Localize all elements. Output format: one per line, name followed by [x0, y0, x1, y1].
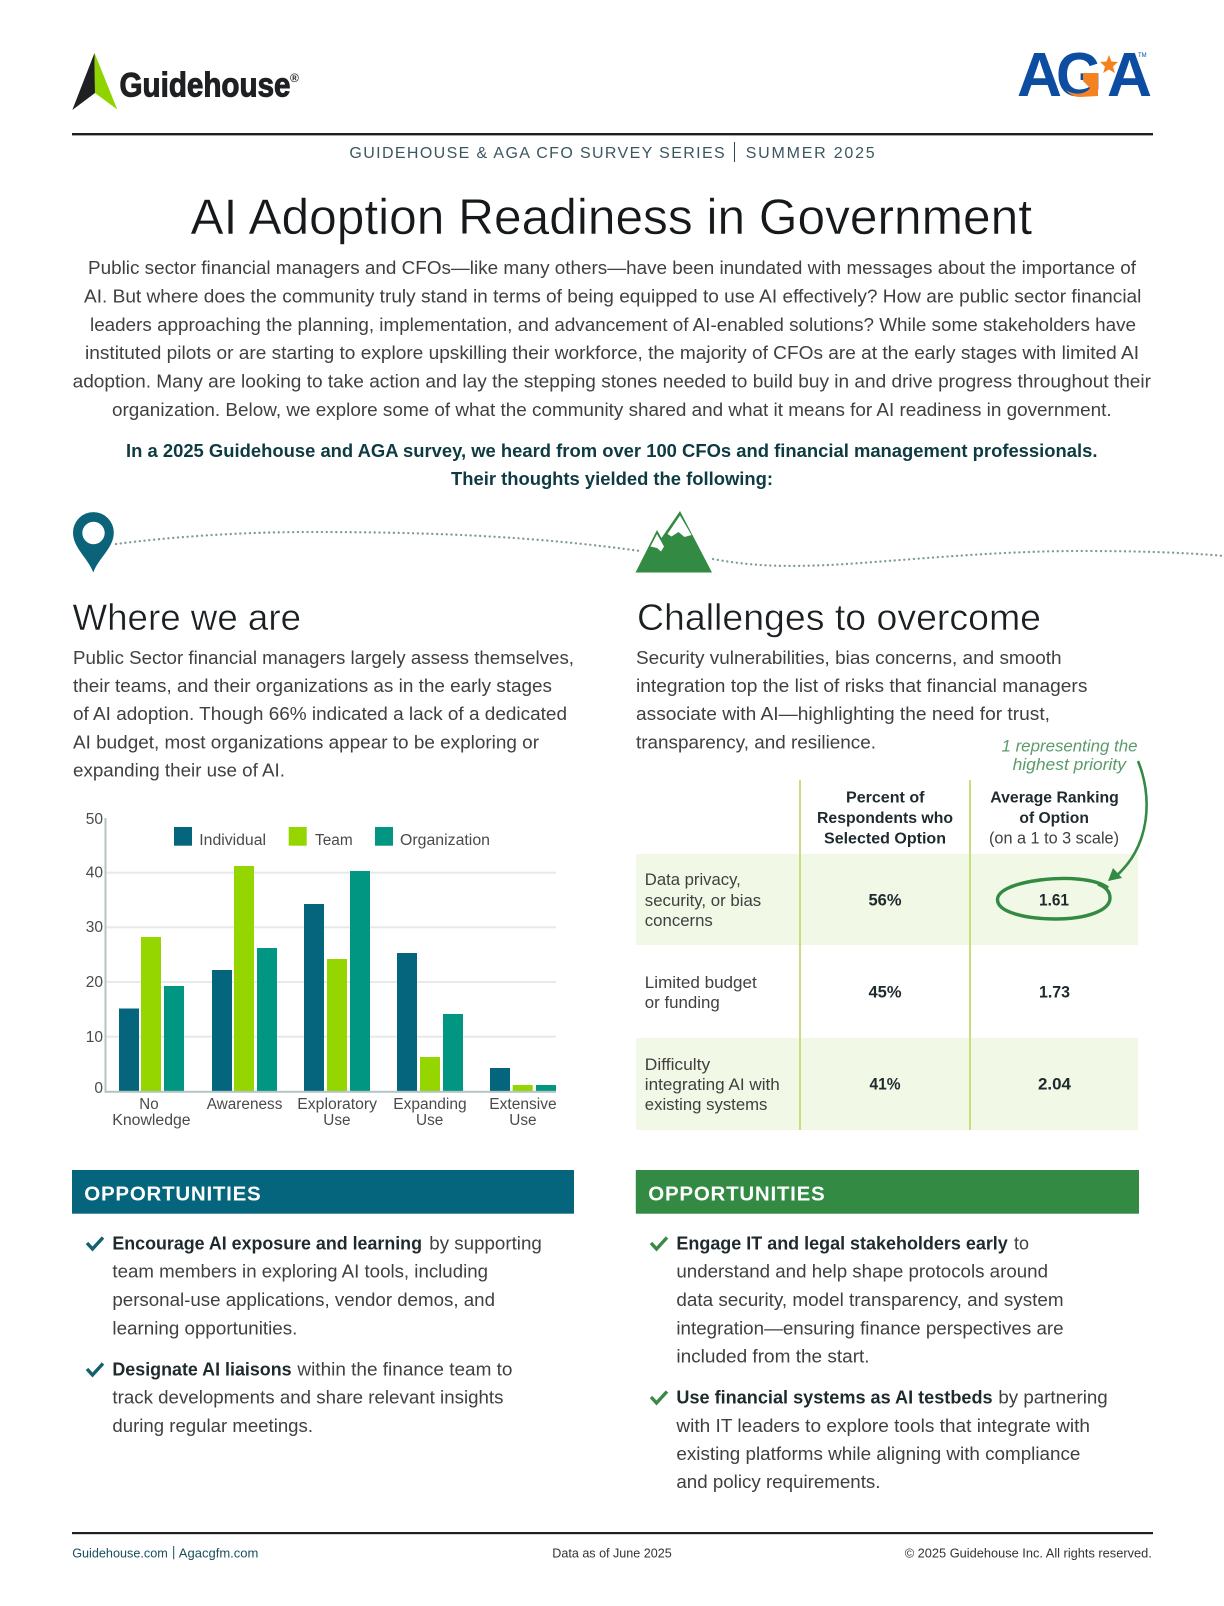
survey statement: Their thoughts yielded the following: [451, 469, 773, 489]
footer: © 2025 Guidehouse Inc. All rights reserved. [905, 1545, 1152, 1560]
series subtitle [349, 142, 875, 162]
bar chart [86, 811, 557, 1129]
x axis labels: Expanding [393, 1096, 467, 1113]
table: risks [636, 780, 1138, 1130]
footer [72, 1545, 1152, 1560]
callout: highest priority note: highest priority [1013, 756, 1128, 774]
y axis labels: 0 [94, 1080, 103, 1097]
bullet: engage IT [651, 1232, 1064, 1367]
x axis labels: Use [323, 1112, 351, 1129]
heading: challenges: Challenges to overcome [637, 596, 1041, 638]
table row: data privacy: 1.61 [1039, 892, 1069, 910]
text: challenges body [636, 647, 1087, 752]
text: challenges body: Security vulnerabilities, bias concerns, and smooth [636, 647, 1062, 668]
bars: individual [119, 904, 510, 1091]
legend: Organization [400, 832, 490, 849]
table row: limited budget: 45% [868, 984, 902, 1002]
table row: difficulty integrating: 41% [870, 1076, 901, 1094]
logo: Guidehouse: Guidehouse [120, 67, 290, 105]
table row: data privacy [645, 871, 1069, 930]
text: where we are body: Public Sector financial managers largely assess themselves, [73, 647, 574, 668]
table row: difficulty integrating: Difficulty [645, 1056, 711, 1074]
bullet: financial systems [651, 1386, 1108, 1492]
bullet: financial systems: and policy requirements. [676, 1471, 881, 1492]
table row: difficulty integrating [645, 1056, 1072, 1114]
footer: Data as of June 2025 [552, 1545, 672, 1560]
banner: opportunities: OPPORTUNITIES [648, 1183, 825, 1206]
banner: opportunities [72, 1170, 574, 1214]
banner: opportunities: OPPORTUNITIES [84, 1183, 261, 1206]
bullet: AI liaisons [87, 1358, 512, 1436]
bars: team [141, 866, 533, 1091]
callout: highest priority note [1002, 738, 1138, 774]
y axis labels: 10 [86, 1029, 103, 1046]
icon: location pin [73, 512, 114, 572]
footer: Agacgfm.com [179, 1545, 258, 1560]
intro paragraph: instituted pilots or are starting to explore upskilling their workforce, the majority of CFOs are at the early stages with limited AI [85, 342, 1139, 363]
icon: mountains [636, 511, 712, 572]
survey statement: In a 2025 Guidehouse and AGA survey, we heard from over 100 CFOs and financial management professionals. [126, 441, 1098, 461]
y axis labels: 20 [86, 974, 103, 991]
table header: Percent of [846, 790, 925, 807]
logo: Guidehouse [72, 53, 299, 110]
y axis labels: 50 [86, 811, 103, 828]
intro paragraph: adoption. Many are looking to take action and lay the stepping stones needed to build buy in and drive progress throughout their [73, 371, 1151, 392]
callout: highest priority note: 1 representing the [1002, 738, 1138, 756]
footer: Guidehouse.com [72, 1545, 168, 1560]
legend [174, 827, 490, 849]
text: where we are body: expanding their use of AI. [73, 760, 285, 781]
table row: difficulty integrating: integrating AI with [645, 1076, 780, 1094]
table header: Respondents who [817, 810, 953, 827]
x axis labels: Awareness [207, 1096, 283, 1113]
text: challenges body: transparency, and resilience. [636, 732, 876, 752]
text: where we are body: AI budget, most organizations appear to be exploring or [73, 732, 539, 752]
table header: Selected Option [824, 831, 946, 848]
bullet: engage IT: Engage IT and legal stakeholders early [676, 1233, 1008, 1253]
table row: difficulty integrating: existing systems [645, 1096, 767, 1114]
highlight circle around 1.61 [997, 879, 1110, 919]
y axis labels: 30 [86, 919, 103, 936]
logo: AGA: G [1056, 41, 1102, 110]
dotted journey path [116, 532, 1224, 566]
intro paragraph [73, 257, 1151, 420]
legend: Individual [199, 832, 266, 849]
bullet: AI exposure: Encourage AI exposure and learning [112, 1233, 422, 1253]
bullet: engage IT: understand and help shape protocols around [676, 1261, 1048, 1282]
bullet: AI liaisons: track developments and share relevant insights [112, 1386, 504, 1407]
x axis labels: Extensive [489, 1096, 557, 1113]
logo: AGA: TM [1138, 53, 1147, 59]
heading: where we are: Where we are [72, 596, 301, 638]
series subtitle: SUMMER 2025 [746, 145, 875, 162]
logo: AGA: A [1017, 41, 1062, 110]
intro paragraph: Public sector financial managers and CFOs—like many others—have been inundated with messages about the importance of [88, 257, 1137, 278]
logo: AGA: A [1107, 41, 1152, 110]
table row: limited budget [645, 974, 1070, 1012]
title: AI Adoption Readiness in Government [190, 189, 1032, 245]
table row: difficulty integrating: 2.04 [1038, 1076, 1072, 1094]
table row: limited budget: 1.73 [1039, 984, 1070, 1002]
survey statement [126, 441, 1098, 489]
bullet: AI exposure: by supporting [429, 1232, 542, 1253]
text: challenges body: associate with AI—highlighting the need for trust, [636, 703, 1050, 724]
table row: limited budget: or funding [645, 994, 720, 1012]
logo: AGA [1017, 41, 1152, 110]
table row: data privacy: Data privacy, [645, 871, 741, 889]
panel: where we are [72, 596, 574, 1129]
bullet: AI exposure: learning opportunities. [112, 1317, 297, 1338]
bullet: financial systems: Use financial systems as AI testbeds [676, 1387, 993, 1407]
table row: limited budget: Limited budget [645, 974, 757, 992]
table header: Average Ranking [990, 790, 1119, 807]
x axis labels [112, 1096, 557, 1129]
text: where we are body: their teams, and their organizations as in the early stages [73, 675, 552, 696]
y axis labels: 40 [86, 864, 103, 882]
x axis labels: Exploratory [297, 1096, 377, 1113]
bullet: AI liaisons: within the finance team to [296, 1358, 512, 1379]
x axis labels: Knowledge [112, 1112, 191, 1129]
legend: Team [315, 832, 353, 849]
arrow: note to circled value [1108, 761, 1147, 881]
bars: organization [164, 871, 556, 1091]
table header: of Option [1019, 810, 1089, 827]
bullet: AI exposure: personal-use applications, vendor demos, and [112, 1289, 495, 1310]
text: where we are body: of AI adoption. Though 66% indicated a lack of a dedicated [73, 703, 567, 724]
table header [817, 790, 1119, 848]
table row: data privacy: 56% [868, 892, 902, 910]
bullet: engage IT: data security, model transparency, and system [676, 1289, 1064, 1310]
text: challenges body: integration top the list of risks that financial managers [636, 675, 1087, 696]
table row: data privacy: concerns [645, 912, 713, 930]
banner: opportunities [636, 1170, 1139, 1214]
intro paragraph: AI. But where does the community truly stand in terms of being equipped to use AI effectively? How are public sector financial [84, 285, 1141, 306]
intro paragraph: leaders approaching the planning, implementation, and advancement of AI-enabled solutions? While some stakeholders have [90, 314, 1136, 335]
y axis labels [86, 811, 103, 1097]
text: where we are body [73, 647, 574, 781]
bullet: engage IT: included from the start. [676, 1346, 870, 1367]
bullet: AI liaisons: Designate AI liaisons [112, 1359, 292, 1379]
bullet: financial systems: with IT leaders to explore tools that integrate with [675, 1415, 1090, 1436]
bullet: AI liaisons: during regular meetings. [112, 1415, 313, 1436]
bullet: AI exposure [87, 1232, 542, 1338]
x axis labels: Use [416, 1112, 443, 1129]
panel: opportunities right [636, 1170, 1139, 1492]
x axis labels: Use [509, 1112, 537, 1129]
series subtitle: GUIDEHOUSE & AGA CFO SURVEY SERIES [349, 145, 725, 162]
bullet: AI exposure: team members in exploring AI tools, including [112, 1261, 488, 1282]
bullet: engage IT: integration—ensuring finance perspectives are [676, 1317, 1064, 1338]
table header: (on a 1 to 3 scale) [989, 830, 1119, 848]
bullet: engage IT: to [1014, 1232, 1029, 1253]
intro paragraph: organization. Below, we explore some of what the community shared and what it means for AI readiness in government. [112, 399, 1112, 420]
table row: data privacy: security, or bias [645, 892, 761, 910]
logo: Guidehouse: ® [290, 71, 299, 85]
bullet: financial systems: by partnering [998, 1386, 1108, 1407]
panel: opportunities left [72, 1170, 574, 1436]
x axis labels: No [139, 1096, 159, 1113]
panel: challenges to overcome [636, 596, 1147, 1130]
bullet: financial systems: existing platforms while aligning with compliance [676, 1443, 1080, 1464]
